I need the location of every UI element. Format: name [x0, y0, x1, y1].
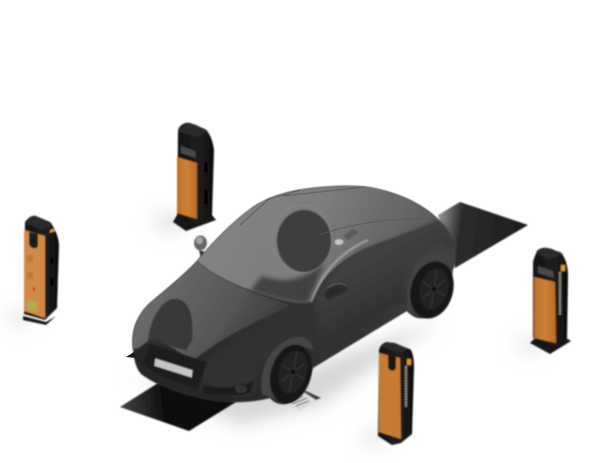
tower: right [530, 248, 571, 354]
tower orange panel [379, 353, 401, 439]
number plate [154, 358, 193, 378]
tower body [177, 123, 214, 224]
rear wheel arch [407, 251, 454, 314]
roof reflections [240, 187, 435, 235]
tower: top rear left [173, 123, 216, 231]
front wheel arch [261, 337, 313, 400]
tower body [378, 342, 414, 445]
far-side seat headrest [277, 210, 331, 272]
tower label [27, 299, 37, 312]
tower vent [181, 146, 196, 158]
rear wheel [404, 256, 460, 324]
tower base [530, 338, 571, 354]
tower body [24, 216, 59, 320]
tower: left [23, 216, 59, 325]
tower side sockets [50, 258, 54, 286]
tower orange panel [534, 277, 556, 343]
tower notch [29, 232, 38, 248]
tower top cap [536, 248, 563, 260]
tower yellow top mark [50, 228, 55, 233]
tower yellow hazard mark [407, 359, 411, 365]
tower base [23, 316, 56, 325]
pillar highlight [311, 240, 368, 302]
rear floor target mat [438, 202, 528, 268]
front wheel [264, 340, 318, 408]
hood [133, 261, 290, 362]
front splitter tip [126, 352, 136, 358]
seat shape behind windshield [250, 262, 325, 303]
lower fender panel [200, 304, 318, 390]
tower top cap [178, 124, 208, 137]
near door panel [314, 220, 455, 352]
floor shadows [8, 214, 542, 445]
tower top cap [25, 217, 52, 230]
cabin glass roof area [197, 186, 438, 303]
tower orange panel [24, 230, 45, 318]
headrest rim [272, 205, 332, 273]
door mirror [324, 282, 348, 300]
tower side label strip [405, 366, 407, 407]
tower side label strip [559, 272, 561, 315]
front floor target mat [120, 383, 236, 431]
lower side intake [203, 381, 254, 395]
far mirror on cabin [343, 229, 359, 240]
tower base [378, 434, 412, 445]
front wheel well sphere [148, 299, 192, 350]
tower: bottom [378, 342, 414, 445]
tower side sockets [204, 162, 208, 204]
tower small squares [27, 255, 33, 279]
far side mirror [194, 236, 207, 258]
tower base [173, 215, 216, 231]
small floor marker under front wheel [282, 391, 321, 411]
tower body [533, 248, 568, 347]
tower top cap [381, 342, 409, 353]
tower yellow hazard mark [561, 265, 565, 271]
tower vent [538, 266, 554, 278]
car [126, 186, 460, 408]
tower notch [388, 355, 396, 371]
tower red light [32, 288, 36, 290]
fog lamp [235, 385, 247, 393]
tower orange panel [177, 157, 197, 219]
grille [143, 344, 207, 388]
car body silhouette [133, 186, 455, 404]
